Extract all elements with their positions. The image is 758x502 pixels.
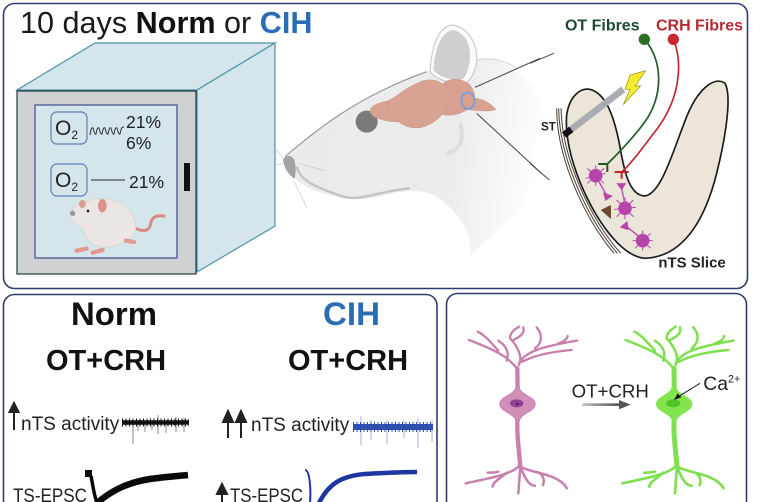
nTS slice diagram <box>530 18 743 271</box>
OT fibre <box>598 34 659 172</box>
panel: electrophysiology <box>4 294 437 502</box>
zoom lines <box>475 58 540 87</box>
nose <box>283 156 295 178</box>
O2 normoxia box: O <box>55 169 71 192</box>
Norm TS-EPSC <box>13 470 188 502</box>
O2 cycling box: 21% <box>126 112 161 132</box>
pink neuron <box>466 327 577 493</box>
icon: lightning bolt <box>623 71 646 105</box>
O2 normoxia box <box>51 164 164 196</box>
O2 normoxia box: 2 <box>71 180 78 194</box>
Norm nTS activity <box>10 403 189 444</box>
CIH nTS activity: nTS activity <box>251 415 350 436</box>
subheading: CIH OT+CRH: OT+CRH <box>288 345 408 377</box>
CIH nTS activity <box>223 411 433 448</box>
Ca2+ label: 2+ <box>728 374 740 386</box>
head <box>283 59 540 257</box>
nTS region marker <box>461 92 475 109</box>
Ca2+ label: Ca <box>703 374 728 395</box>
icon: rat <box>70 199 164 253</box>
O2 cycling box: 6% <box>126 133 151 153</box>
Norm nTS activity: nTS activity <box>21 414 120 435</box>
green neuron <box>622 327 734 493</box>
zoom line ends <box>530 53 554 180</box>
panel: calcium imaging <box>446 294 746 502</box>
heading: CIH: CIH <box>323 296 380 332</box>
brown terminal <box>601 205 611 219</box>
CIH TS-EPSC <box>217 470 417 502</box>
door handle <box>184 163 190 191</box>
panel: experimental setup <box>4 4 748 288</box>
O2 normoxia box: 21% <box>129 172 164 192</box>
stimulating electrode <box>564 89 623 135</box>
nTS slice label: nTS Slice <box>658 254 726 271</box>
Ca2+ label <box>674 374 740 400</box>
CRH fibre <box>615 34 679 179</box>
ear <box>430 25 477 83</box>
hypoxia chamber <box>17 43 275 274</box>
neurons <box>586 166 653 251</box>
solitary tract <box>557 108 621 253</box>
rat head with brain <box>276 25 541 257</box>
slice <box>566 81 728 258</box>
title: 10 days Norm or CIH <box>20 6 312 40</box>
brain <box>370 79 496 128</box>
OT label: OT Fibres <box>565 18 640 35</box>
eye <box>356 111 378 133</box>
O2 cycling box: O <box>55 117 71 140</box>
O2 cycling box <box>51 112 161 153</box>
CRH label: CRH Fibres <box>656 18 743 35</box>
O2 cycling box: 2 <box>71 128 78 142</box>
subheading: Norm OT+CRH: OT+CRH <box>46 345 166 377</box>
treatment arrow: OT+CRH <box>572 380 649 401</box>
heading: Norm: Norm <box>71 296 157 332</box>
ST label: ST <box>541 121 556 134</box>
